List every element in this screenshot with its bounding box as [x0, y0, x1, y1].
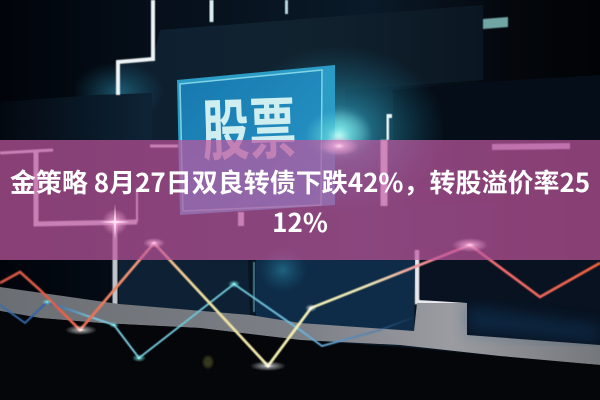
title text: 金策略 8月27日双良转债下跌42%，转股溢价率25 — [10, 163, 590, 200]
title text — [10, 163, 590, 240]
glow: light at board corner — [305, 110, 373, 162]
panel: navy wall under band center — [256, 260, 415, 331]
icon: sparkles on chart — [42, 280, 317, 371]
line: short light bar top — [210, 0, 214, 22]
panel: gray floor band — [0, 287, 600, 365]
line: white stepped light bar — [118, 0, 153, 95]
panel: lower left dark wall — [0, 93, 152, 140]
line: pink-white frame left — [0, 140, 570, 320]
icon: teal block — [483, 17, 508, 29]
panel: right wall — [393, 75, 600, 140]
panel: board face — [180, 70, 322, 211]
icon: pink star sparkle left — [100, 204, 130, 240]
chart: warm line — [0, 243, 600, 366]
title band — [0, 140, 600, 260]
icon: pink glow near board — [319, 136, 359, 156]
glow: left wall light — [73, 62, 163, 122]
chart: blue line — [0, 284, 420, 358]
glow: blue floor reflection — [467, 305, 600, 342]
panel: central wall — [118, 5, 483, 140]
icon: sparkle on chart peak right — [452, 238, 488, 252]
panel: board outer frame — [177, 65, 335, 215]
glow: teal light behind board — [235, 45, 445, 215]
icon: sparkle on chart peak — [143, 238, 165, 248]
line: white post at right of board — [387, 116, 392, 140]
glow: pillar glow — [259, 248, 307, 292]
line: short light bar top right — [285, 0, 288, 14]
heading: board text: 股票 — [200, 74, 298, 175]
panel: black floor — [0, 311, 600, 400]
panel: darker block at right of band — [388, 205, 495, 248]
title text: 12% — [272, 203, 328, 240]
panel: dark navy wall under band right — [420, 260, 600, 345]
panel: navy wall under band left — [119, 260, 250, 315]
